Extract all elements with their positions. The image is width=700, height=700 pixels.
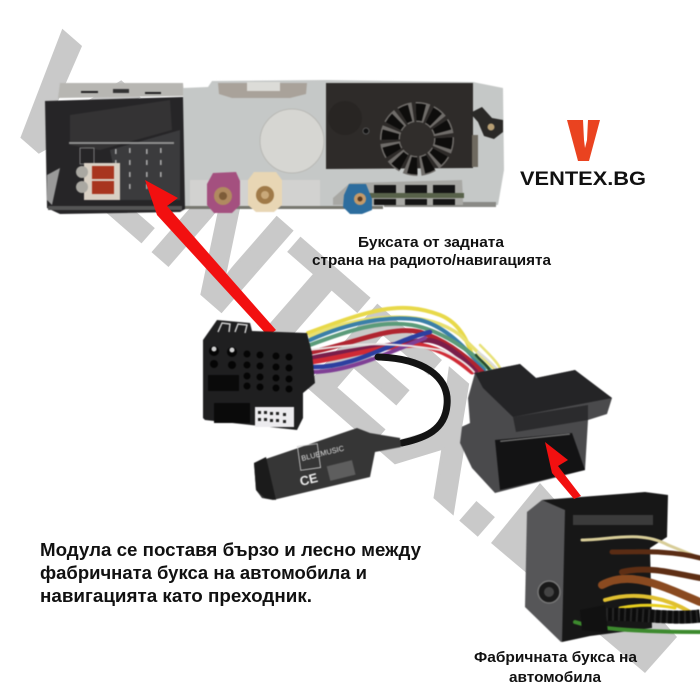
caption: radio socket: страна на радиото/навигацията <box>312 252 552 269</box>
logo mark V <box>567 120 600 161</box>
radio connector socket <box>45 97 185 214</box>
bottom right socket with wires <box>525 492 700 642</box>
board slots <box>333 180 464 205</box>
right harness connector <box>460 364 612 493</box>
logo: VENTEX.BG <box>520 120 646 190</box>
logo wordmark: VENTEX.BG <box>520 168 646 190</box>
connector: pink <box>207 172 240 213</box>
pin grid <box>209 346 292 392</box>
main text block <box>40 539 422 606</box>
main text block: Модула се поставя бързо и лесно между <box>40 539 422 560</box>
main text block: навигацията като преходник. <box>40 585 312 606</box>
module: BlueMusic <box>254 428 401 500</box>
arrow: red to radio socket <box>145 180 276 336</box>
module: BlueMusic: BLUEMUSIC <box>300 443 346 463</box>
main text block: фабричната букса на автомобила и <box>40 562 367 583</box>
module: BlueMusic: CE <box>298 470 320 489</box>
caption: car socket <box>474 649 638 686</box>
caption: car socket: автомобила <box>509 669 602 686</box>
connector: beige <box>248 172 282 212</box>
latch tabs <box>218 323 247 333</box>
radio metal chassis <box>183 80 504 210</box>
photo: radio rear <box>45 80 504 214</box>
connector: black antenna <box>470 107 503 167</box>
connector: blue <box>343 184 372 214</box>
white mini socket <box>255 407 294 427</box>
housing grey <box>525 500 570 642</box>
red terminals <box>76 163 120 200</box>
radio heatsink panel with fan <box>326 83 473 169</box>
radio silver top strip <box>58 83 184 98</box>
caption: radio socket: Буксата от задната <box>358 234 505 251</box>
wires: main harness <box>308 308 500 372</box>
caption: radio socket <box>312 234 552 269</box>
cable: module lead <box>378 357 447 443</box>
caption: car socket: Фабричната букса на <box>474 649 638 666</box>
left harness connector <box>203 320 315 430</box>
wires brown, yellow, green <box>575 537 700 632</box>
arrow: red to car socket <box>545 442 581 499</box>
